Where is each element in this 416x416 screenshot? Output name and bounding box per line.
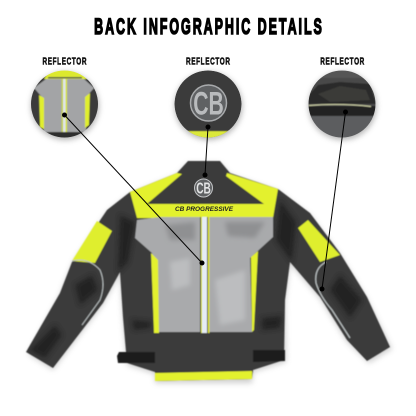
label: right reflector: REFLECTOR <box>320 55 365 67</box>
left waist strap <box>117 352 155 363</box>
right sleeve piping <box>316 262 350 338</box>
lower dark back band <box>155 333 253 372</box>
left sleeve yellow <box>72 221 112 263</box>
leader line: left <box>62 112 204 266</box>
mesh panel <box>135 217 273 332</box>
brand text: CB PROGRESSIVE <box>175 207 234 213</box>
jacket silhouette <box>26 161 390 381</box>
jacket drop shadow <box>28 163 392 383</box>
fabric folds <box>30 200 362 358</box>
center reflective strip <box>200 217 201 333</box>
back logo: CB <box>196 179 211 197</box>
left mesh side yellow <box>151 253 159 333</box>
detail circle: mesh back panel <box>30 70 100 140</box>
title: BACK INFOGRAPHIC DETAILS <box>94 14 322 39</box>
left shoulder yellow <box>130 173 240 218</box>
logo lettering: CB <box>193 85 224 122</box>
mesh shading <box>165 222 265 325</box>
left sleeve piping <box>72 260 103 325</box>
right mesh side yellow <box>251 251 258 332</box>
leader line: right <box>320 110 348 292</box>
leader line: middle <box>202 124 210 178</box>
label: middle reflector: REFLECTOR <box>186 55 231 67</box>
label: left reflector: REFLECTOR <box>42 55 87 67</box>
right waist strap <box>253 350 285 362</box>
right shoulder and back yoke yellow <box>147 173 278 218</box>
right sleeve yellow <box>298 220 340 262</box>
detail circle: CB logo <box>174 70 242 140</box>
yellow hem <box>155 371 252 381</box>
jacket <box>26 161 392 383</box>
detail circle: sleeve piping <box>308 70 376 140</box>
